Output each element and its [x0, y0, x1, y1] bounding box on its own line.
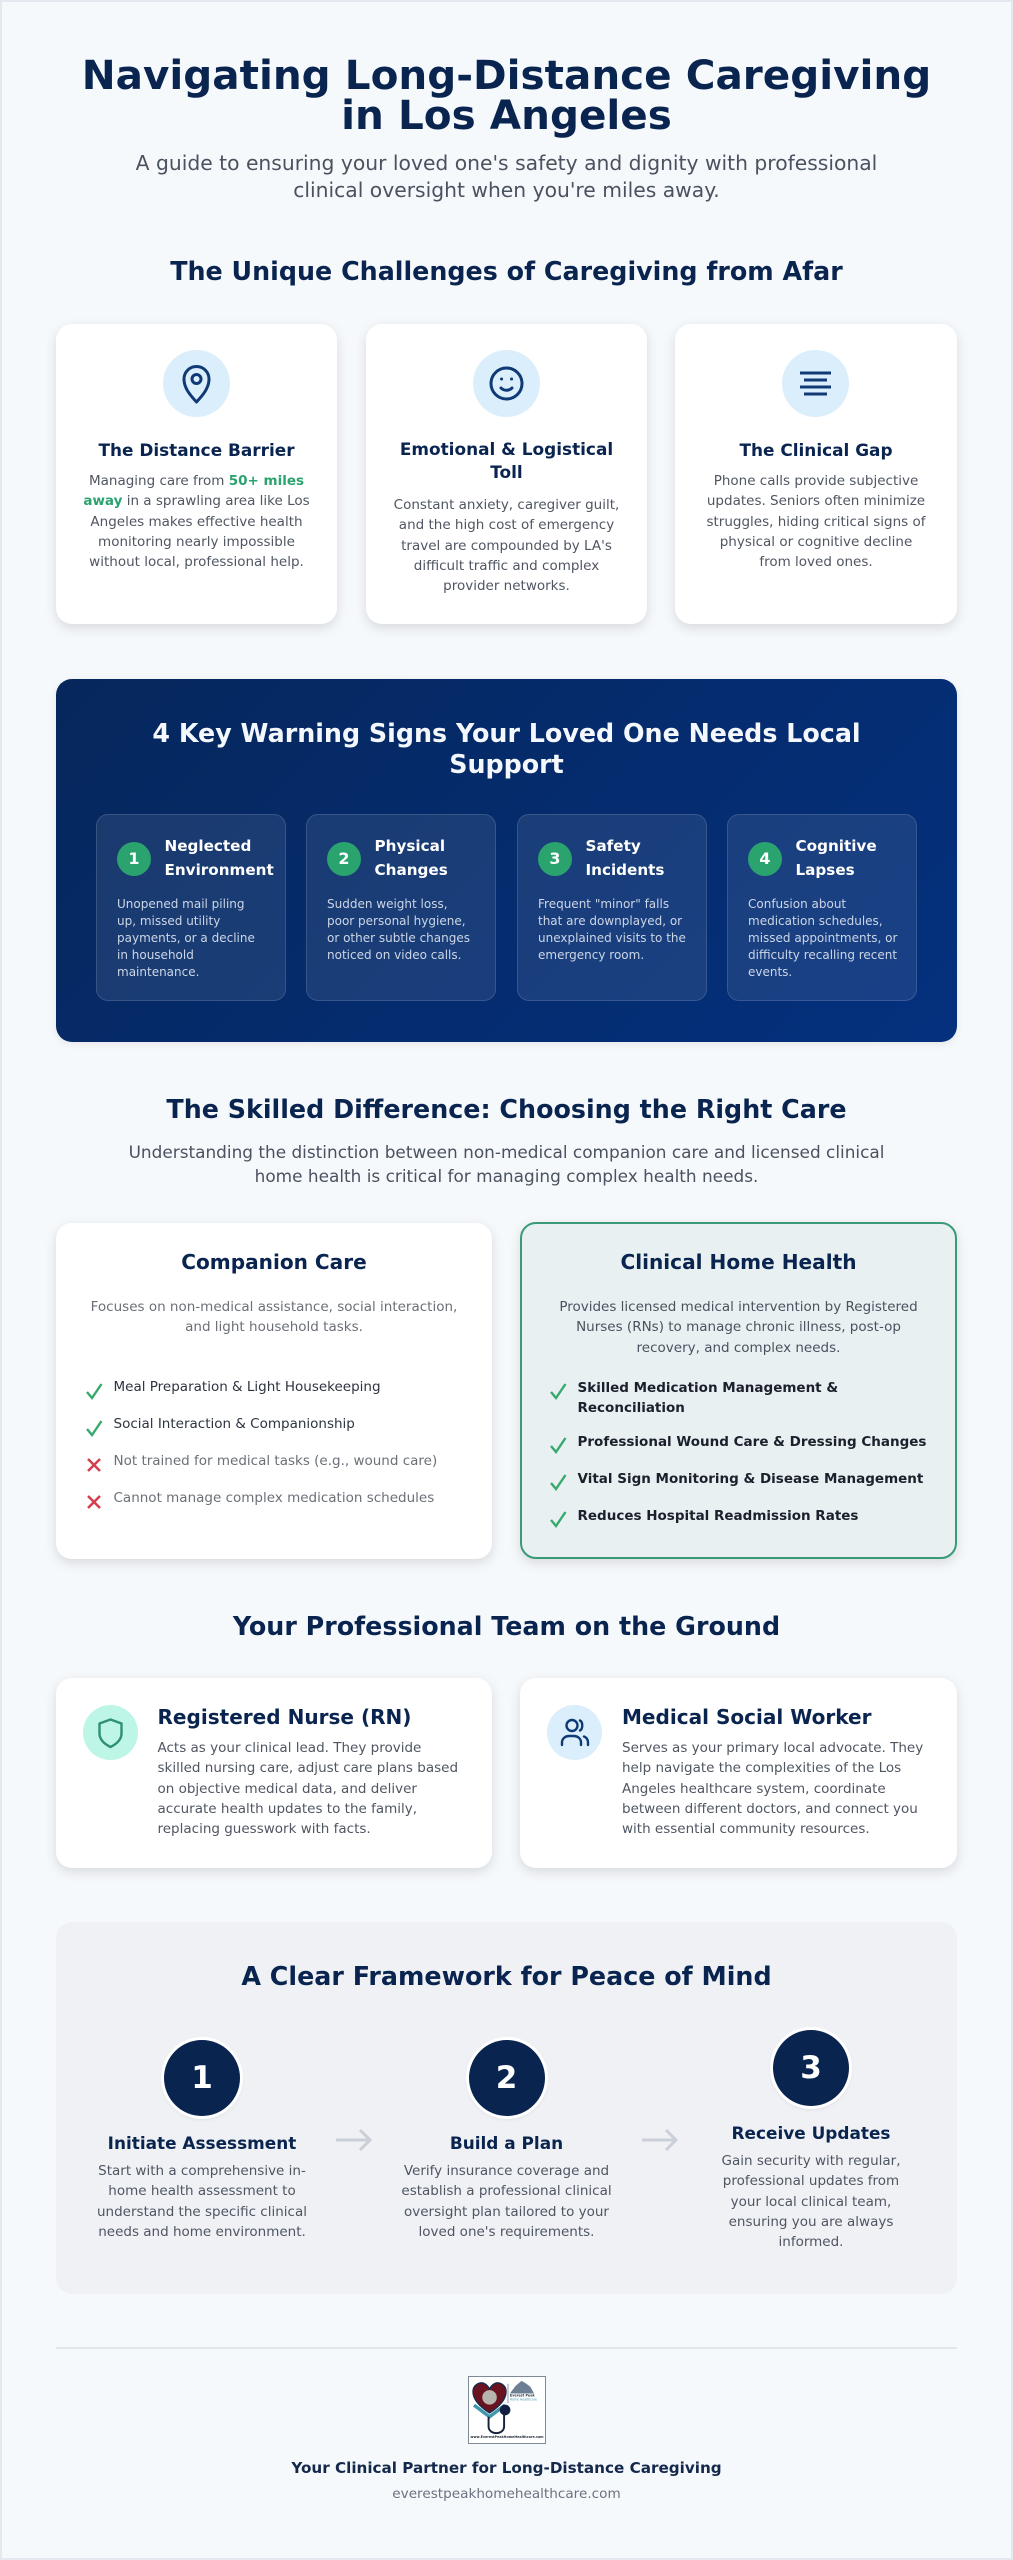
card text: replacing guesswork with facts.: [158, 1821, 371, 1837]
item text: Social Interaction & Companionship: [114, 1416, 355, 1432]
panel: medical social worker: [520, 1678, 957, 1868]
card text: [158, 1740, 458, 1837]
number badge: [538, 842, 572, 876]
step text: [685, 2151, 937, 2252]
sign text: [117, 897, 255, 979]
step title: Receive Updates: [732, 2122, 890, 2142]
item text: Skilled Medication Management &: [578, 1380, 838, 1396]
section intro: home health is critical for managing complex health needs.: [255, 1166, 758, 1186]
step title: Build a Plan: [450, 2132, 563, 2152]
sign title: Safety: [586, 837, 641, 855]
step text: informed.: [779, 2234, 843, 2250]
card text: provider networks.: [443, 578, 570, 594]
heading: team: Your Professional Team on the Ground: [233, 1611, 780, 1641]
sign title: Incidents: [586, 861, 664, 879]
icon: users: [547, 1705, 602, 1760]
card title: [400, 438, 613, 482]
card text: skilled nursing care, adjust care plans based: [158, 1760, 458, 1776]
card text: between different doctors, and connect you: [622, 1801, 918, 1817]
sign title: [796, 837, 877, 879]
heading: warning signs: Support: [449, 748, 564, 778]
title: in Los Angeles: [341, 91, 672, 139]
card title: Clinical Home Health: [620, 1250, 857, 1274]
step text: your local clinical team,: [731, 2194, 891, 2210]
logo: Home Healthcare: [510, 2397, 537, 2401]
number badge: 3: [549, 849, 561, 868]
sign 3: [517, 814, 707, 1001]
item: not trained: [87, 1453, 437, 1472]
footer tagline: Your Clinical Partner for Long-Distance Caregiving: [291, 2459, 722, 2477]
item text: Not trained for medical tasks (e.g., wound care): [114, 1453, 437, 1469]
heading: framework: A Clear Framework for Peace of Mind: [241, 1961, 772, 1991]
panel: the distance barrier: [56, 324, 337, 624]
card text: updates. Seniors often minimize: [707, 493, 925, 509]
step text: [380, 2161, 632, 2242]
panel: emotional and logistical toll: [366, 324, 647, 624]
panel: the clinical gap: [675, 324, 957, 624]
step number: 2: [496, 2060, 517, 2096]
card text: Managing care from 50+ miles: [89, 473, 304, 489]
card text: on objective medical data, and deliver: [158, 1781, 417, 1797]
icon: check: [86, 1420, 102, 1437]
sign text: maintenance.: [117, 965, 199, 979]
sign text: or other subtle changes: [327, 931, 470, 945]
sign text: in household: [117, 948, 194, 962]
sign text: that are downplayed, or: [538, 914, 682, 928]
step number: 3: [800, 2050, 822, 2086]
card text: Acts as your clinical lead. They provide: [158, 1740, 421, 1756]
step 3: [685, 2027, 937, 2257]
sign title: Changes: [374, 861, 448, 879]
item: social interaction: [86, 1416, 355, 1437]
sign title: Neglected: [164, 837, 251, 855]
sign title: Environment: [164, 861, 274, 879]
card title: Medical Social Worker: [622, 1705, 872, 1729]
card text: travel are compounded by LA's: [401, 538, 612, 554]
card text: accurate health updates to the family,: [158, 1801, 417, 1817]
sign text: payments, or a decline: [117, 931, 255, 945]
step text: Gain security with regular,: [721, 2153, 900, 2169]
step number: 1: [191, 2060, 213, 2096]
sign text: Unopened mail piling: [117, 897, 245, 911]
card text: Constant anxiety, caregiver guilt,: [394, 497, 619, 513]
step number: [164, 2040, 240, 2116]
title: Navigating Long-Distance Caregiving: [82, 51, 931, 99]
card text: and the high cost of emergency: [399, 517, 614, 533]
card text: Nurses (RNs) to manage chronic illness, post-op: [576, 1319, 901, 1335]
card text: [91, 1299, 457, 1335]
card title: Registered Nurse (RN): [158, 1705, 411, 1729]
card text: physical or cognitive decline: [720, 534, 912, 550]
item text: Cannot manage complex medication schedules: [114, 1490, 434, 1506]
panel: companion care: [56, 1223, 492, 1559]
subtitle: clinical oversight when you're miles away.: [293, 178, 720, 202]
step text: oversight plan tailored to your: [404, 2204, 609, 2220]
item text: Reduces Hospital Readmission Rates: [578, 1508, 858, 1524]
item: vital signs: [550, 1470, 923, 1491]
item: cannot manage: [87, 1490, 434, 1509]
card text: with essential community resources.: [622, 1821, 870, 1837]
sign text: poor personal hygiene,: [327, 914, 466, 928]
panel: registered nurse: [56, 1678, 492, 1868]
card text: difficult traffic and complex: [414, 558, 599, 574]
step text: needs and home environment.: [98, 2224, 306, 2240]
step text: professional updates from: [723, 2173, 899, 2189]
card title: Companion Care: [181, 1250, 367, 1274]
icon: check: [550, 1383, 566, 1400]
number badge: 1: [128, 849, 140, 868]
card text: [394, 497, 619, 594]
item text: Reconciliation: [578, 1400, 685, 1416]
card text: without local, professional help.: [89, 554, 304, 570]
subtitle: A guide to ensuring your loved one's safety and dignity with professional: [136, 151, 877, 175]
sign title: Lapses: [796, 861, 855, 879]
sign title: Cognitive: [796, 837, 877, 855]
sign text: [538, 897, 686, 962]
step text: ensuring you are always: [729, 2214, 893, 2230]
number badge: [327, 842, 361, 876]
sign text: missed appointments, or: [748, 931, 897, 945]
logo: www.EverestPeakHomeHealthcare.com: [470, 2435, 544, 2439]
card text: [622, 1740, 923, 1837]
step text: home health assessment to: [108, 2183, 296, 2199]
sign text: noticed on video calls.: [327, 948, 461, 962]
sign title: [374, 837, 448, 879]
card text: [559, 1299, 918, 1356]
card text: [83, 473, 310, 570]
card text: Serves as your primary local advocate. They: [622, 1740, 923, 1756]
sign text: Confusion about: [748, 897, 846, 911]
sign text: up, missed utility: [117, 914, 220, 928]
heading: warning signs: 4 Key Warning Signs Your Loved One Needs Local: [152, 718, 861, 748]
sign text: emergency room.: [538, 948, 644, 962]
icon: check: [86, 1383, 102, 1400]
logo: Everest Peak: [510, 2393, 535, 2397]
step title: Initiate Assessment: [108, 2132, 296, 2152]
sign text: unexplained visits to the: [538, 931, 686, 945]
icon: check: [550, 1474, 566, 1491]
card text: Provides licensed medical intervention by Registered: [559, 1299, 918, 1315]
card title: Emotional & Logistical: [400, 438, 613, 458]
icon: map pin: [163, 350, 230, 417]
heading: warning signs: [152, 718, 861, 778]
step text: Verify insurance coverage and: [404, 2163, 609, 2179]
sign 1: [96, 814, 286, 1001]
card text: Focuses on non-medical assistance, social interaction,: [91, 1299, 457, 1315]
icon: shield: [83, 1705, 138, 1760]
card text: away in a sprawling area like Los: [83, 493, 310, 509]
number badge: [748, 842, 782, 876]
title: [82, 51, 931, 139]
card text: Angeles healthcare system, coordinate: [622, 1781, 886, 1797]
item text: Vital Sign Monitoring & Disease Management: [578, 1470, 923, 1486]
item: medication management: [550, 1380, 838, 1416]
sign title: Physical: [374, 837, 445, 855]
icon: cross: [87, 1458, 101, 1472]
card text: recovery, and complex needs.: [637, 1340, 840, 1356]
number badge: [117, 842, 151, 876]
icon: check: [550, 1437, 566, 1454]
step text: understand the specific clinical: [97, 2204, 307, 2220]
sign text: [748, 897, 898, 979]
item text: Meal Preparation & Light Housekeeping: [114, 1379, 381, 1395]
item: wound care: [550, 1434, 926, 1454]
panel: clinical home health: [520, 1222, 957, 1559]
footer: [56, 2347, 957, 2512]
panel: warning signs: [56, 679, 957, 1042]
sign 4: [727, 814, 917, 1001]
card text: struggles, hiding critical signs of: [706, 514, 926, 530]
card title: Toll: [490, 462, 523, 482]
heading: skilled difference: The Skilled Difference: Choosing the Right Care: [166, 1094, 847, 1124]
card text: [706, 473, 926, 570]
icon: cross: [87, 1495, 101, 1509]
item: meal preparation: [86, 1379, 381, 1400]
card text: monitoring nearly impossible: [98, 534, 295, 550]
subtitle: [136, 151, 877, 202]
arrow 1: [336, 2129, 372, 2151]
step number: [773, 2030, 849, 2106]
number badge: 2: [338, 849, 350, 868]
heading: challenges: The Unique Challenges of Caregiving from Afar: [170, 256, 843, 286]
footer url: everestpeakhomehealthcare.com: [392, 2486, 621, 2502]
panel: framework: [56, 1922, 957, 2294]
sign 2: [306, 814, 496, 1001]
sign title: [586, 837, 664, 879]
step 1: [97, 2037, 307, 2240]
sign text: medication schedules,: [748, 914, 883, 928]
step text: loved one's requirements.: [419, 2224, 594, 2240]
card text: Angeles makes effective health: [90, 514, 303, 530]
card text: help navigate the complexities of the Los: [622, 1760, 901, 1776]
sign title: [164, 837, 274, 879]
sign text: events.: [748, 965, 792, 979]
step number: [468, 2040, 544, 2116]
section intro: Understanding the distinction between non-medical companion care and licensed clinical: [129, 1142, 884, 1162]
step text: establish a professional clinical: [401, 2183, 612, 2199]
step text: Start with a comprehensive in-: [98, 2163, 306, 2179]
card text: Phone calls provide subjective: [714, 473, 918, 489]
sign text: Frequent "minor" falls: [538, 897, 669, 911]
step 2: [380, 2037, 632, 2257]
arrow 2: [642, 2128, 678, 2152]
section intro: [129, 1142, 884, 1186]
card text: from loved ones.: [759, 554, 873, 570]
sign text: difficulty recalling recent: [748, 948, 897, 962]
number badge: 4: [759, 849, 771, 868]
step text: [97, 2163, 307, 2240]
icon: smile: [473, 350, 540, 417]
item text: Professional Wound Care & Dressing Changes: [578, 1434, 926, 1450]
logo: [468, 2376, 546, 2444]
icon: check: [550, 1511, 566, 1528]
item: readmission: [550, 1508, 858, 1528]
item text: [578, 1380, 838, 1416]
sign text: Sudden weight loss,: [327, 897, 448, 911]
icon: centered lines: [782, 350, 849, 417]
sign text: [327, 897, 470, 962]
card title: The Distance Barrier: [98, 440, 295, 460]
card title: The Clinical Gap: [739, 440, 893, 460]
card text: and light household tasks.: [185, 1319, 363, 1335]
